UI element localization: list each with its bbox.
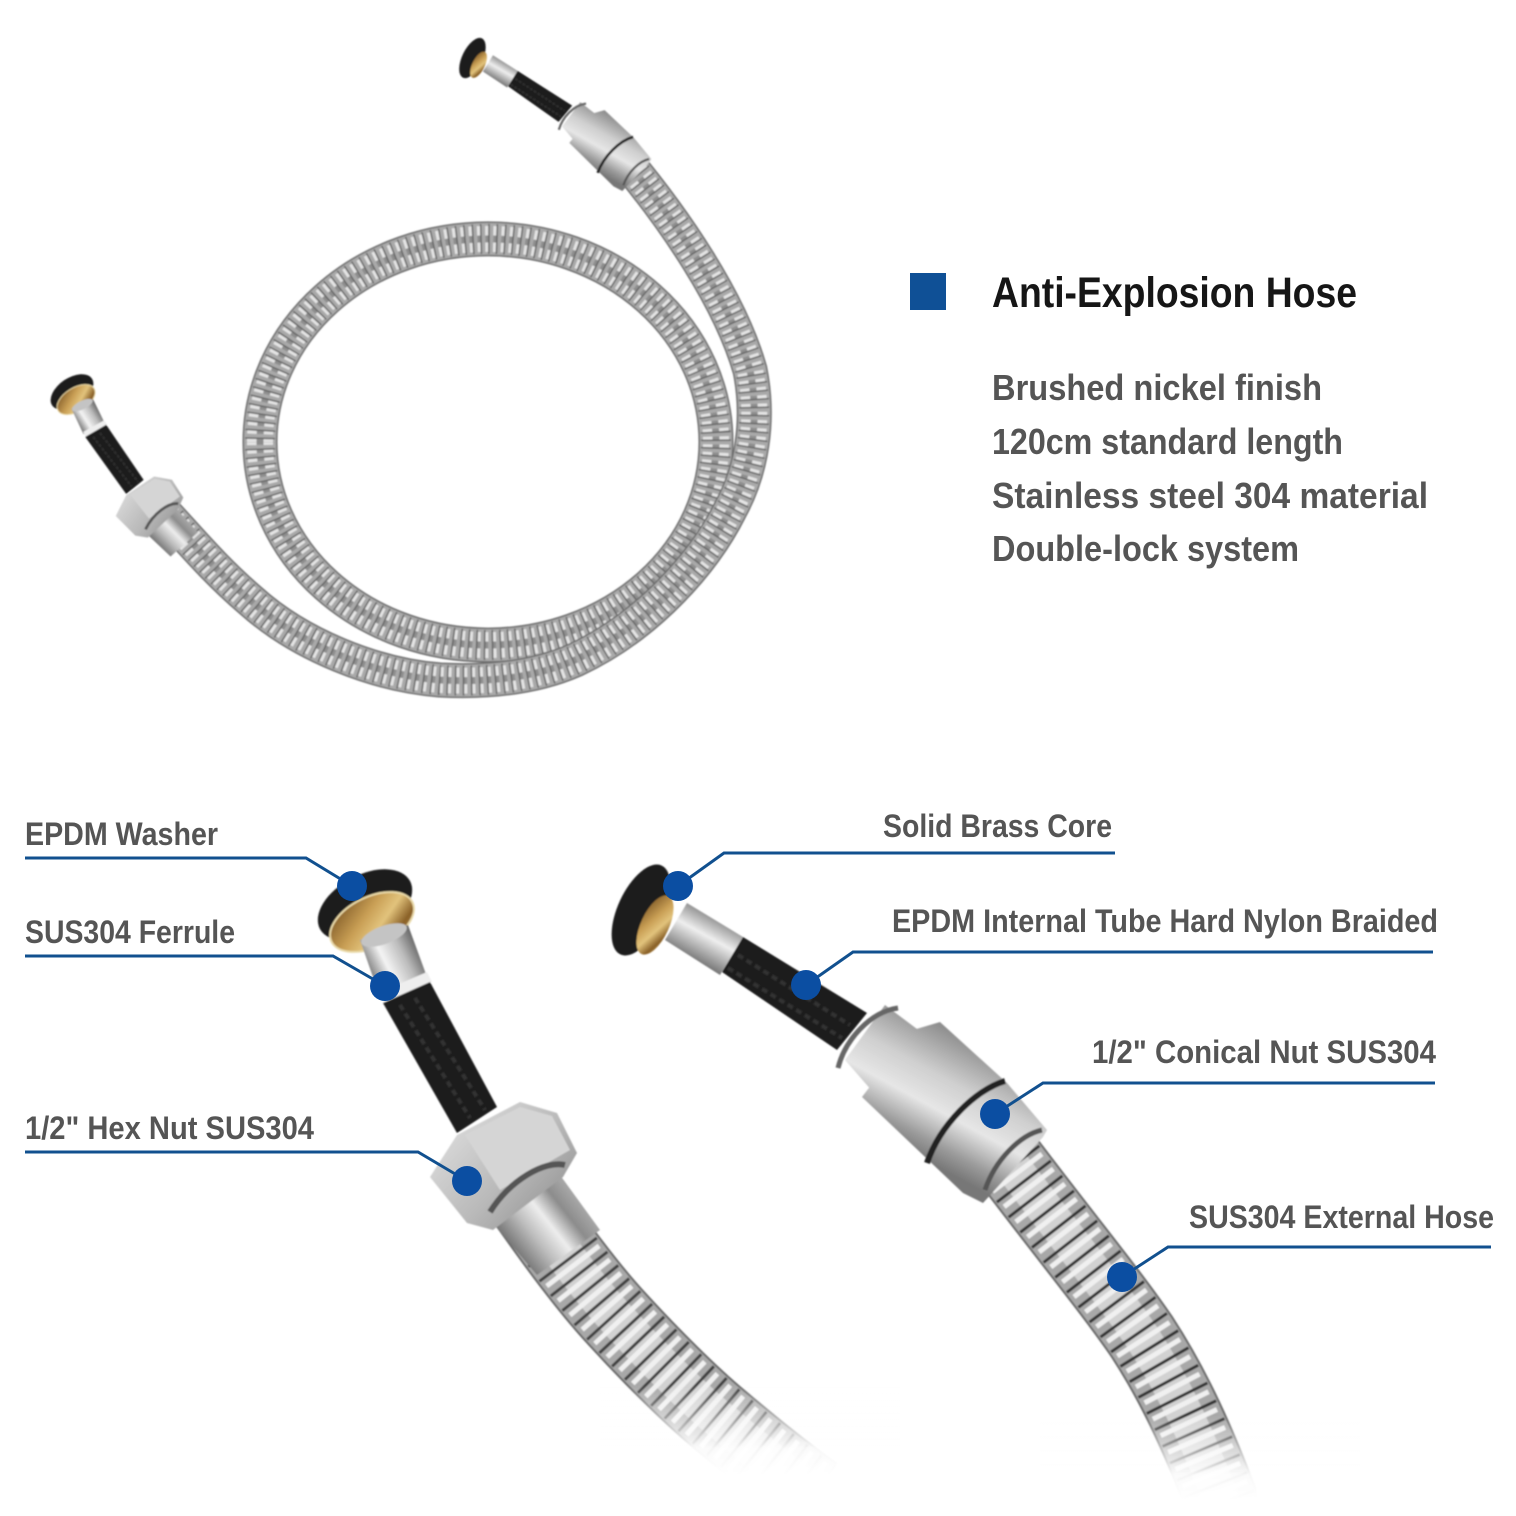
top connector xyxy=(452,34,654,192)
callout: EPDM Washer: EPDM Washer xyxy=(25,816,218,852)
right corrugated hose xyxy=(1000,1150,1225,1510)
specification list: Brushed nickel finish xyxy=(992,367,1322,408)
callout: Solid Brass Core xyxy=(663,808,1115,901)
title: Anti-Explosion Hose xyxy=(992,269,1357,317)
conical nut connector xyxy=(599,856,1047,1203)
callout: Conical Nut: 1/2" Conical Nut SUS304 xyxy=(1092,1034,1436,1070)
blue square bullet xyxy=(910,273,946,310)
callout: Hex Nut: 1/2" Hex Nut SUS304 xyxy=(25,1110,314,1146)
left corrugated hose xyxy=(525,1200,815,1495)
specification list: Stainless steel 304 material xyxy=(992,475,1428,516)
specification list xyxy=(992,367,1428,569)
panel: left end detail photo xyxy=(306,855,815,1495)
callout: SUS304 Ferrule: SUS304 Ferrule xyxy=(25,914,235,950)
panel: right end detail photo xyxy=(599,856,1225,1510)
coiled hose loop xyxy=(260,239,716,645)
callout: Hex Nut xyxy=(25,1110,482,1196)
callout: EPDM Internal Tube xyxy=(791,903,1438,1000)
callout: SUS304 Ferrule xyxy=(25,914,400,1001)
outer hose strand xyxy=(165,160,754,681)
hex nut connector xyxy=(306,855,600,1275)
panel: coiled hose product photo xyxy=(42,34,754,681)
callout: Solid Brass Core: Solid Brass Core xyxy=(883,808,1112,844)
callout: Conical Nut xyxy=(980,1034,1436,1129)
callout: EPDM Internal Tube: EPDM Internal Tube Hard Nylon Braided xyxy=(892,903,1438,939)
callout: External Hose xyxy=(1107,1199,1494,1292)
specification list: 120cm standard length xyxy=(992,421,1343,462)
left connector xyxy=(42,357,200,568)
callout: EPDM Washer xyxy=(25,816,367,901)
specification list: Double-lock system xyxy=(992,528,1299,569)
